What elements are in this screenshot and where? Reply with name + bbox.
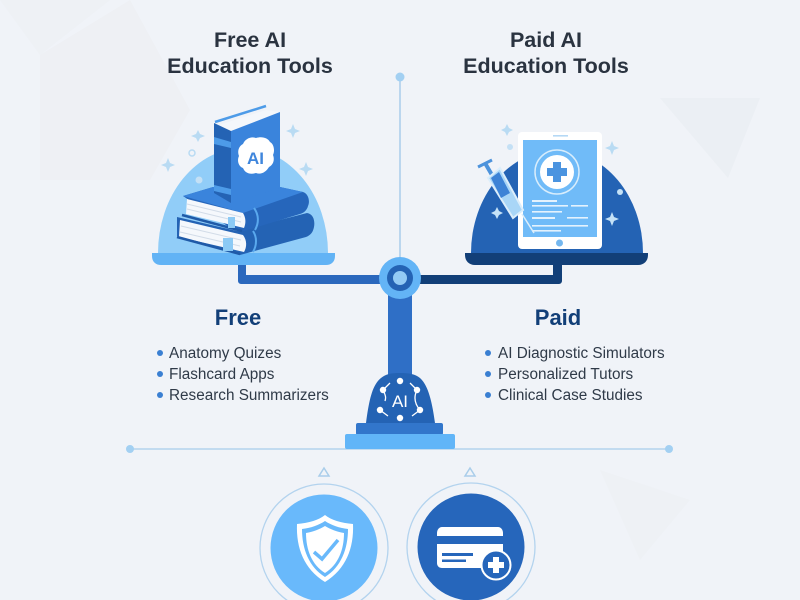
small triangle marker left (319, 468, 329, 476)
icon: shield badge (260, 484, 388, 600)
scale pivot (379, 257, 421, 299)
horizontal guide line (126, 445, 673, 453)
heading: paid tools: Education Tools (463, 54, 629, 78)
paid heading: Paid (535, 305, 581, 330)
syringe (478, 160, 534, 233)
paid list: Clinical Case Studies (498, 387, 643, 404)
scale base with AI network (345, 373, 455, 449)
sparkles (501, 124, 619, 155)
paid list: Personalized Tutors (498, 366, 634, 383)
upper book (182, 187, 309, 231)
left pan: books (152, 106, 335, 265)
medical cross icon (535, 150, 579, 194)
scale column (388, 290, 412, 380)
heading: free tools: Free AI (214, 28, 286, 52)
heading: paid tools: Paid AI (510, 28, 582, 52)
left plate (152, 253, 335, 265)
free heading: Free (215, 305, 261, 330)
scale beam: right arm (420, 265, 562, 284)
paid list: AI Diagnostic Simulators (498, 345, 665, 362)
lower book (177, 213, 314, 255)
right plate (465, 253, 648, 265)
free list (157, 345, 329, 404)
small triangle marker right (465, 468, 475, 476)
heading: free tools: Education Tools (167, 54, 333, 78)
right dome (471, 150, 643, 253)
icon: credit card badge (407, 483, 535, 600)
scale beam: left arm (238, 265, 381, 284)
free list: Anatomy Quizes (169, 345, 282, 362)
free list: Flashcard Apps (169, 366, 275, 383)
upright AI book (214, 106, 280, 203)
record text lines (532, 200, 588, 232)
brain icon: AI (247, 149, 264, 168)
scale base with AI network: AI (392, 392, 408, 411)
vertical guide line (396, 72, 404, 262)
right pan: tablet and syringe (465, 124, 648, 265)
free list: Research Summarizers (169, 387, 329, 404)
tablet (518, 132, 602, 249)
left dome (158, 148, 328, 253)
sparkles (161, 124, 313, 184)
paid list (485, 345, 665, 404)
